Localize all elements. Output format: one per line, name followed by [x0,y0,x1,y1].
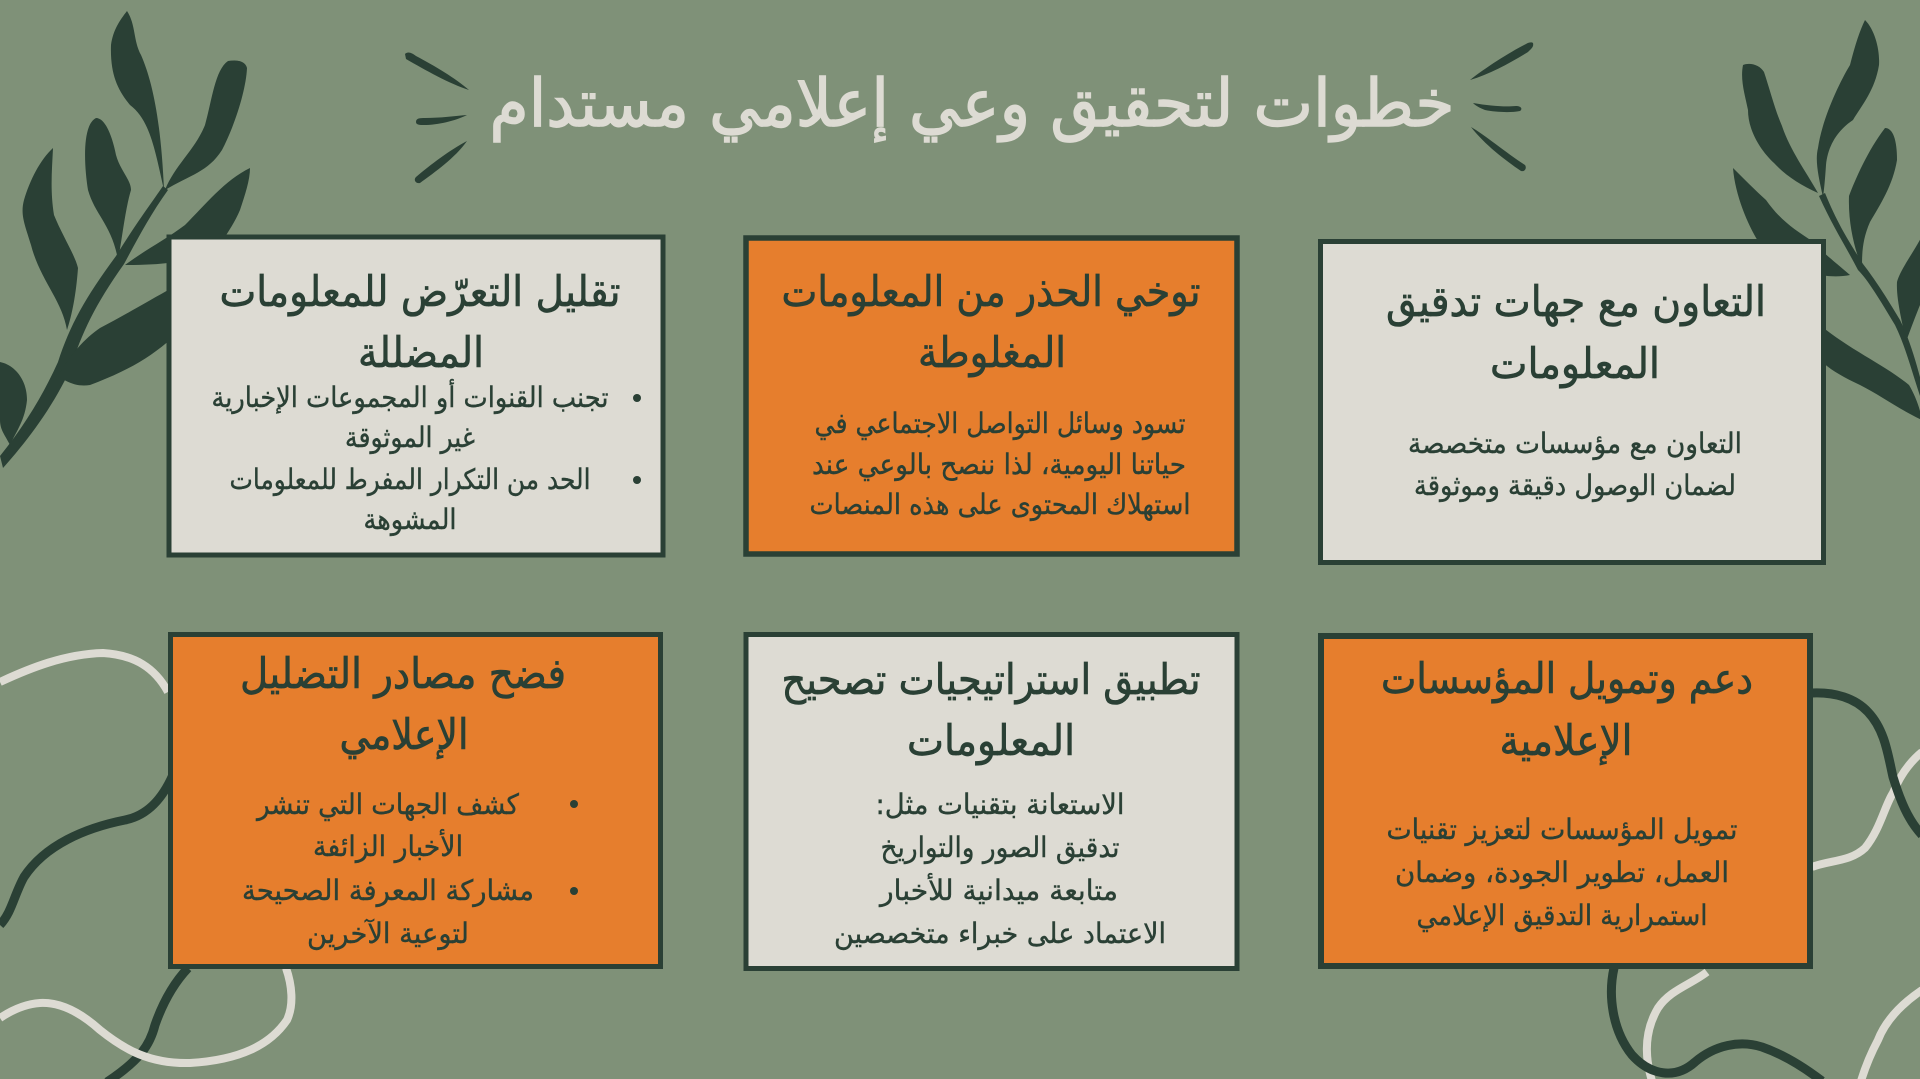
decorative curves: bottom right [1611,693,1920,1079]
icon: title ticks left [405,53,469,183]
panel: support media institutions: دعم وتمويل المؤسسات [1381,654,1753,704]
panel: caution about misinformation: حياتنا اليومية، لذا ننصح بالوعي عند [812,448,1186,481]
panel: correction strategies: تطبيق استراتيجيات تصحيح [782,655,1200,705]
panel: correction strategies: المعلومات [907,716,1075,765]
panel: reduce exposure: تقليل التعرّض للمعلومات [220,267,620,316]
title: خطوات لتحقيق وعي إعلامي مستدام [490,65,1454,143]
panel: expose disinformation sources: الإعلامي [340,710,468,760]
panel: caution about misinformation: المغلوطة [918,328,1066,377]
panel: reduce exposure: تجنب القنوات أو المجموعات الإخبارية [212,378,608,414]
panel: expose disinformation sources: فضح مصادر التضليل [240,649,566,699]
panel: correction strategies: تدقيق الصور والتواريخ [880,831,1120,864]
icon: title ticks right [1470,42,1533,171]
panel: fact-checking cooperation: التعاون مع جهات تدقيق [1386,277,1766,327]
panel: support media institutions: تمويل المؤسسات لتعزيز تقنيات [1386,813,1738,846]
panel: caution about misinformation [746,238,1237,554]
panel: reduce exposure [169,237,663,555]
panel: correction strategies: الاعتماد على خبراء متخصصين [834,917,1166,950]
panel: fact-checking cooperation: المعلومات [1490,339,1660,388]
panel: expose disinformation sources [170,634,660,966]
panel: correction strategies: الاستعانة بتقنيات مثل: [876,788,1124,821]
panel: expose disinformation sources: الأخبار الزائفة [313,828,463,863]
panel: reduce exposure: غير الموثوقة [345,421,475,454]
panel: support media institutions: العمل، تطوير الجودة، وضمان [1395,856,1729,889]
panel: reduce exposure: الحد من التكرار المفرط للمعلومات [230,463,590,496]
panel: support media institutions [1321,636,1810,966]
panel: correction strategies [746,634,1237,968]
decorative curves: bottom left [0,653,291,1079]
panel: correction strategies: متابعة ميدانية للأخبار [878,872,1118,907]
panel: reduce exposure: المضللة [358,328,484,377]
panel: reduce exposure: المشوهة [364,503,456,536]
panel: support media institutions: استمرارية التدقيق الإعلامي [1416,899,1708,932]
panel: fact-checking cooperation [1320,242,1824,562]
panel: expose disinformation sources: كشف الجهات التي تنشر [255,788,520,821]
icon: right leaf sprig [1733,20,1920,420]
panel: fact-checking cooperation: لضمان الوصول دقيقة وموثوقة [1414,469,1736,502]
icon: left leaf sprig [0,11,250,468]
panel: caution about misinformation: تسود وسائل التواصل الاجتماعي في [814,407,1186,440]
panel: support media institutions: الإعلامية [1500,716,1632,765]
panel: expose disinformation sources: مشاركة المعرفة الصحيحة [242,874,534,907]
panel: expose disinformation sources: لتوعية الآخرين [307,917,469,950]
panel: caution about misinformation: توخي الحذر من المعلومات [782,267,1200,317]
panel: caution about misinformation: استهلاك المحتوى على هذه المنصات [810,488,1190,521]
panel: fact-checking cooperation: التعاون مع مؤسسات متخصصة [1408,427,1742,460]
